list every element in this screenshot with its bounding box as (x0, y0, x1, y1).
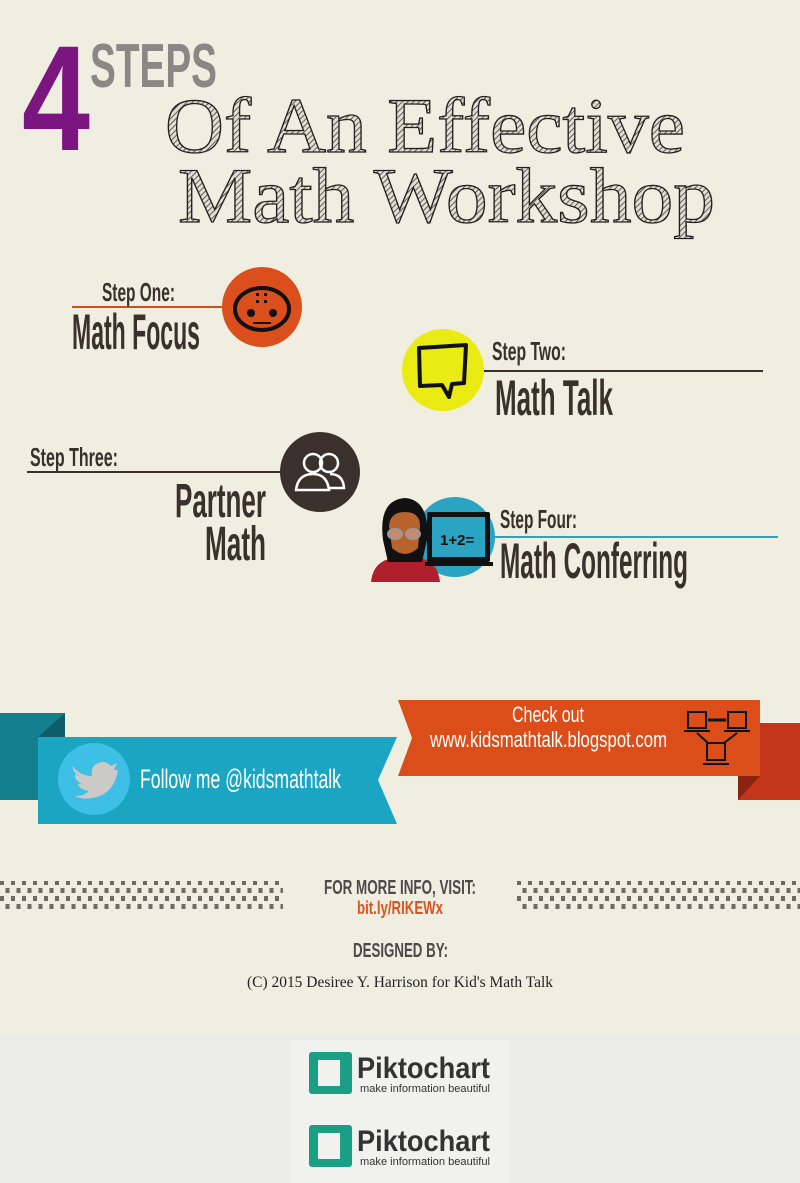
piktochart logo 2: make information beautiful (360, 1156, 490, 1168)
banner: twitter (0, 713, 397, 824)
banner: blog: Check out (512, 702, 584, 727)
title: 4 steps: STEPS (90, 32, 217, 101)
title: Of An Effective Math Workshop (165, 82, 715, 239)
piktochart logo 1 (309, 1052, 490, 1095)
footer (0, 1035, 800, 1183)
step two: Step Two: (492, 336, 566, 366)
piktochart logo 1: make information beautiful (360, 1083, 490, 1095)
icon: laptop: 1+2= (440, 532, 474, 549)
designed by: DESIGNED BY: (353, 940, 448, 962)
step one: Step One: (102, 277, 175, 307)
title: Of An Effective Math Workshop: Of An Effective (165, 82, 685, 169)
icon: laptop (425, 512, 493, 566)
banner: blog (398, 700, 800, 800)
step one: Math Focus (72, 304, 200, 360)
title: Of An Effective Math Workshop: Math Workshop (178, 152, 715, 239)
step three: Math (205, 518, 266, 571)
step three (27, 432, 360, 571)
banner: twitter: Follow me @kidsmathtalk (140, 764, 341, 794)
piktochart logo 2 (309, 1125, 490, 1168)
step four (371, 497, 778, 589)
icon: orange face (222, 267, 302, 347)
icon: people (280, 432, 360, 512)
step three: Partner (175, 475, 266, 528)
banner: blog: www.kidsmathtalk.blogspot.com (429, 727, 667, 752)
more info text (324, 877, 476, 918)
step two: Math Talk (495, 370, 613, 426)
more info text: bit.ly/RIKEWx (357, 898, 443, 918)
title: 4 steps: 4 (22, 14, 90, 182)
designed by (247, 940, 553, 991)
title: 4 steps (22, 14, 217, 182)
icon: teacher (371, 498, 440, 582)
icon: speech bubble (402, 329, 484, 411)
piktochart logo 2: Piktochart (357, 1125, 490, 1158)
designed by: (C) 2015 Desiree Y. Harrison for Kid's Math Talk (247, 974, 553, 991)
more info text: FOR MORE INFO, VISIT: (324, 877, 476, 899)
decorative dot bands (0, 881, 283, 912)
step two (402, 329, 763, 426)
step four: Step Four: (500, 504, 577, 534)
icon: twitter bird (58, 743, 130, 815)
step one (72, 267, 302, 360)
piktochart logo 1: Piktochart (357, 1052, 490, 1085)
icon: network computers (684, 712, 750, 764)
step three: Step Three: (30, 442, 118, 472)
